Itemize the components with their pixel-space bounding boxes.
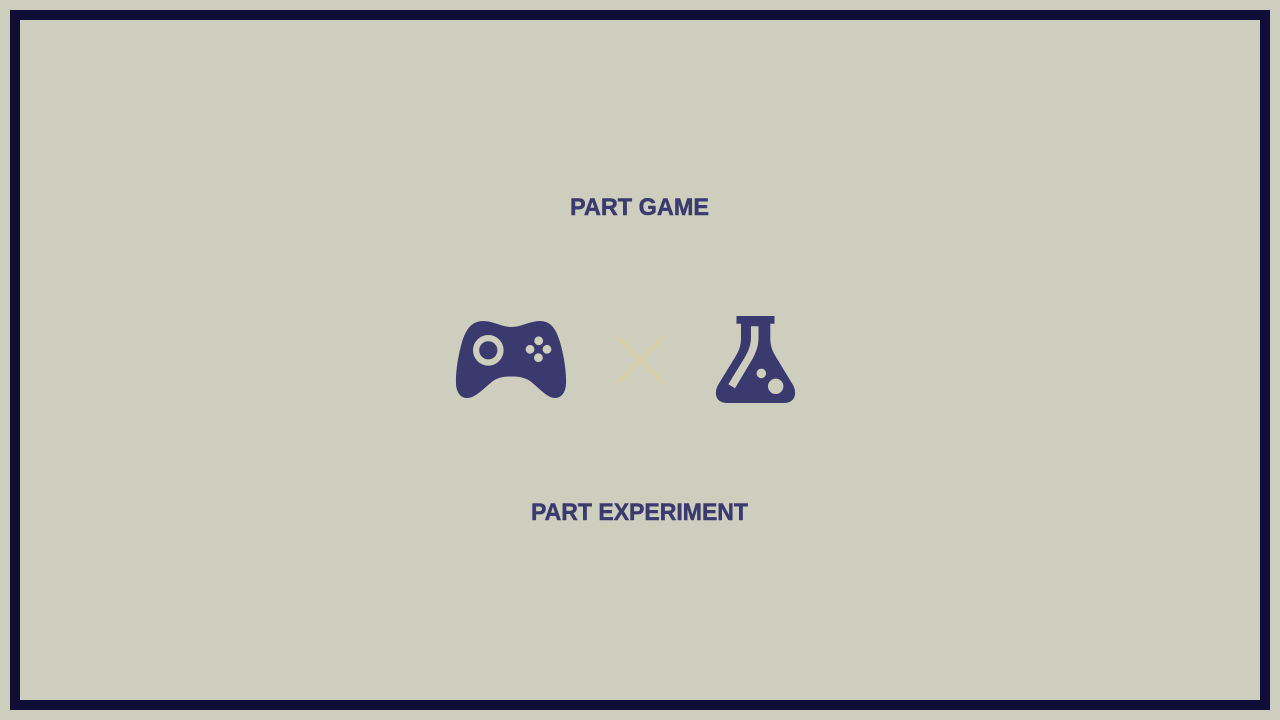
heading: part game: PART GAME (570, 194, 709, 221)
icon: multiply cross (618, 338, 662, 382)
icon: lab flask (716, 316, 795, 403)
heading: part experiment: PART EXPERIMENT (531, 499, 748, 526)
icon: game controller (456, 321, 566, 398)
